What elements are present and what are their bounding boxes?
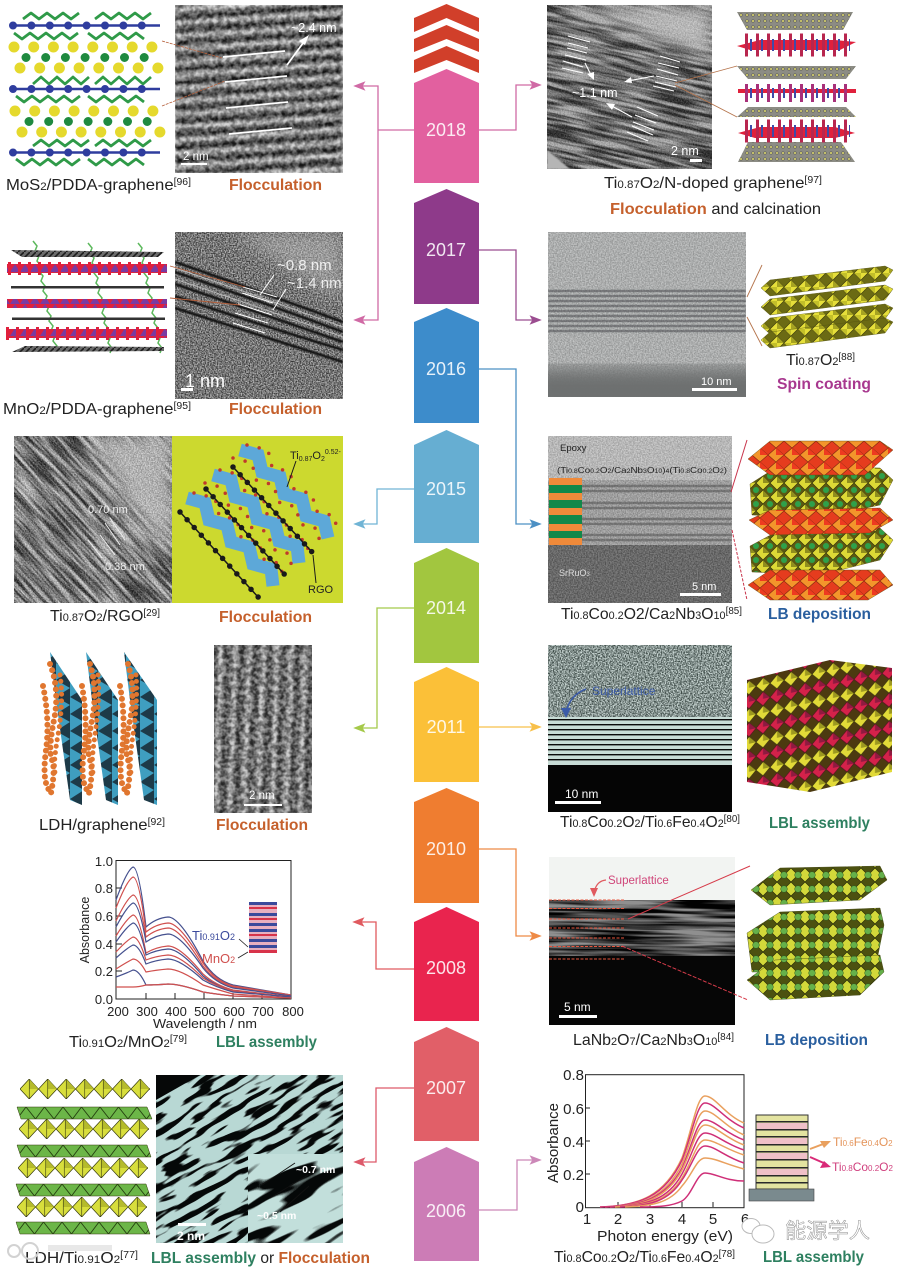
caption: LaNb2O7/Ca2Nb3O10: LaNb2O7/Ca2Nb3O10: [573, 1032, 717, 1049]
label arrow: Ti0.8Co0.2O2: Ti0.8Co0.2O2: [832, 1160, 894, 1174]
micrograph: Ti0.87O2/N-doped graphene TEM: [547, 5, 712, 169]
timeline arrow: 2010: [414, 788, 479, 903]
micrograph: LaNb2O7/Ca2Nb3O10 TEM: 5 nm: [564, 1000, 591, 1014]
diagram: Ti0.87O2/N-doped graphene structure: [737, 12, 856, 162]
leader lines: MoS2: [162, 41, 225, 106]
micrograph: Ti0.87O2/RGO TEM: 0.38 nm: [105, 561, 145, 573]
caption: Ti0.8Co0.2O2/Ca2Nb3O10: Ti0.8Co0.2O2/Ca2Nb3O10: [561, 606, 726, 623]
micrograph: Ti0.8Co0.2O2/Ti0.6Fe0.4O2 TEM: [548, 645, 732, 812]
diagram: Ti0.87O2/RGO structure: 0.87: [299, 456, 312, 463]
chart: Ti0.8Co0.2O2/Ti0.6Fe0.4O2 absorbance vs photon energy: 0.4: [563, 1134, 584, 1151]
micrograph: Ti0.87O2/N-doped graphene TEM: ~1.1 nm: [572, 86, 618, 100]
chart: Ti0.91O2/MnO2 absorbance vs wavelength: 0.4: [95, 937, 113, 952]
timeline arrow: 2011: 2011: [427, 717, 465, 737]
caption: MoS2/PDDA-graphene: MoS2/PDDA-graphene: [6, 177, 169, 194]
diagram: Ti0.87O2 layered structure: [761, 266, 893, 348]
timeline arrow: 2017: 2017: [426, 240, 466, 260]
label leaders: [238, 939, 248, 958]
diagram: Ti0.8Co0.2O2/Ca2Nb3O10 structure: [748, 441, 893, 600]
chart: Ti0.91O2/MnO2 absorbance vs wavelength: 0.8: [95, 881, 113, 896]
chart: Ti0.8Co0.2O2/Ti0.6Fe0.4O2 absorbance vs photon energy: Photon energy (eV): [597, 1228, 733, 1245]
arrow: 2018 to left panels: [355, 82, 414, 324]
method label: Flocculation: Flocculation: [219, 609, 312, 626]
micrograph: MoS2 TEM with 2.4 nm spacing: [175, 5, 343, 173]
arrow: 2011 to right panel: [479, 724, 540, 730]
micrograph: MnO2 TEM with lattice spacings: ~1.4 nm: [287, 275, 342, 292]
chart: Ti0.91O2/MnO2 absorbance vs wavelength: Wavelength / nm: [153, 1016, 257, 1031]
caption: Ti0.8Co0.2O2/Ti0.6Fe0.4O2: Ti0.8Co0.2O2/Ti0.6Fe0.4O2: [560, 814, 724, 831]
caption: MnO2/PDDA-graphene: [95]: [174, 401, 191, 412]
leader lines: Ti0.87O2: [747, 265, 762, 346]
chart: Ti0.8Co0.2O2/Ti0.6Fe0.4O2 absorbance vs photon energy: 5: [709, 1211, 717, 1228]
caption: LDH/graphene: LDH/graphene: [39, 817, 143, 834]
micrograph: Ti0.87O2/N-doped graphene TEM: 2 nm: [671, 144, 699, 158]
chart: Ti0.91O2/MnO2 absorbance vs wavelength: 800: [282, 1004, 304, 1019]
timeline arrow: 2008: [414, 907, 479, 1021]
micrograph: Ti0.8Co0.2O2/Ca2Nb3O10 TEM: [548, 436, 732, 603]
micrograph: Ti0.8Co0.2O2/Ti0.6Fe0.4O2 TEM: Superlattice: [592, 684, 656, 698]
method label: LB deposition: LB deposition: [765, 1032, 868, 1049]
arrow: 2007 to left panel: [355, 1088, 414, 1166]
caption: LDH/graphene: [92]: [148, 817, 165, 828]
caption: Ti0.91O2/MnO2: Ti0.91O2/MnO2: [69, 1034, 170, 1051]
chart: Ti0.8Co0.2O2/Ti0.6Fe0.4O2 absorbance vs photon energy: 4: [678, 1211, 686, 1228]
caption: MnO2/PDDA-graphene: MnO2/PDDA-graphene: [3, 401, 168, 418]
chart: Ti0.8Co0.2O2/Ti0.6Fe0.4O2 absorbance vs photon energy: 0.6: [563, 1101, 584, 1118]
chart: Ti0.8Co0.2O2/Ti0.6Fe0.4O2 absorbance vs photon energy: 3: [646, 1211, 654, 1228]
diagram: Ti0.87O2/RGO structure: RGO: [308, 584, 334, 596]
micrograph: Ti0.8Co0.2O2/Ca2Nb3O10 TEM: Epoxy: [560, 443, 587, 454]
timeline arrow: 2018: 2018: [426, 120, 466, 140]
timeline arrow: 2008: 2008: [426, 958, 466, 978]
chart: Ti0.8Co0.2O2/Ti0.6Fe0.4O2 absorbance vs photon energy: [545, 1067, 749, 1245]
micrograph: Ti0.8Co0.2O2/Ca2Nb3O10 TEM: SrRuO3: [559, 568, 591, 578]
leader lines: Ti0.87O2/N-doped graphene: [675, 66, 737, 117]
method label: LBL assembly: LBL assembly: [763, 1249, 864, 1266]
micrograph: LDH/Ti0.91O2 TEM: ~0.7 nm: [296, 1164, 335, 1176]
diagram: MnO2/PDDA-graphene structure: [6, 241, 167, 353]
method label: Flocculation: Flocculation: [216, 817, 308, 834]
chart: Ti0.8Co0.2O2/Ti0.6Fe0.4O2 absorbance vs photon energy: 2: [614, 1211, 622, 1228]
inset: orange and green layer stack: [549, 478, 582, 545]
micrograph: MnO2 TEM with lattice spacings: 1 nm: [185, 371, 225, 391]
chart: Ti0.91O2/MnO2 absorbance vs wavelength: Absorbance: [78, 897, 92, 963]
micrograph: LDH/Ti0.91O2 TEM: [156, 1075, 343, 1243]
chart: Ti0.91O2/MnO2 absorbance vs wavelength: 0.2: [95, 964, 113, 979]
timeline arrow: 2006: 2006: [426, 1201, 466, 1221]
micrograph: LDH/Ti0.91O2 TEM: 2 nm: [177, 1229, 205, 1243]
caption: Ti0.8Co0.2O2/Ti0.6Fe0.4O2: [80]: [724, 814, 740, 825]
timeline arrow: 2007: [414, 1027, 479, 1141]
chart: Ti0.91O2/MnO2 absorbance vs wavelength: 0.6: [95, 909, 113, 924]
caption: Ti0.8Co0.2O2/Ti0.6Fe0.4O2: [78]: [719, 1249, 735, 1260]
method label: LBL assembly: LBL assembly: [769, 815, 870, 832]
caption: Ti0.91O2/MnO2: [79]: [170, 1034, 187, 1045]
chart: Ti0.8Co0.2O2/Ti0.6Fe0.4O2 absorbance vs photon energy: 0: [576, 1199, 584, 1216]
micrograph: MoS2 TEM with 2.4 nm spacing: ~2.4 nm: [291, 21, 337, 35]
watermark: WeChat icon and name: [742, 1218, 870, 1243]
caption: Ti0.87O2/N-doped graphene: [97]: [804, 175, 822, 186]
method label: Spin coating: Spin coating: [777, 376, 871, 393]
chart: Ti0.91O2/MnO2 absorbance vs wavelength: 300: [136, 1004, 158, 1019]
caption: Ti0.87O2: Ti0.87O2: [786, 352, 838, 369]
arrow: 2010 to right panel: [479, 849, 540, 940]
diagram: LDH/Ti0.91O2 structure: [16, 1079, 152, 1234]
micrograph: MoS2 TEM with 2.4 nm spacing: 2 nm: [183, 151, 209, 163]
caption: Ti0.87O2/RGO: Ti0.87O2/RGO: [50, 608, 143, 625]
timeline arrow: 2014: [414, 548, 479, 663]
chart: Ti0.91O2/MnO2 absorbance vs wavelength: 500: [194, 1004, 216, 1019]
arrow: 2016 to right panel: [479, 369, 540, 528]
arrow: 2006 to right panel: [479, 1156, 540, 1210]
timeline arrow: 2015: 2015: [426, 479, 466, 499]
timeline arrow: 2011: [414, 667, 479, 782]
series label: MnO2: MnO2: [202, 951, 235, 966]
chart: Ti0.91O2/MnO2 absorbance vs wavelength: 0.0: [95, 992, 113, 1007]
timeline arrow: 2007: 2007: [426, 1078, 466, 1098]
chart: Ti0.8Co0.2O2/Ti0.6Fe0.4O2 absorbance vs photon energy: 1: [583, 1211, 591, 1228]
timeline arrow: 2016: [414, 308, 479, 423]
caption: Ti0.87O2: [88]: [838, 352, 855, 363]
arrow: 2014 to left panel: [355, 608, 414, 732]
leader lines: MnO2: [170, 266, 245, 305]
chart: Ti0.91O2/MnO2 absorbance vs wavelength: 600: [223, 1004, 245, 1019]
label arrow: Ti0.6Fe0.4O2: Ti0.6Fe0.4O2: [833, 1135, 893, 1149]
chart: Ti0.91O2/MnO2 absorbance vs wavelength: 200: [107, 1004, 129, 1019]
timeline arrow: 2017: [414, 189, 479, 304]
leader lines: LaNb2O7/Ca2Nb3O10: [622, 866, 750, 1000]
diagram: Ti0.87O2/RGO structure: 2: [321, 456, 325, 463]
inset: blue and red layer stack: [249, 902, 277, 953]
chart: Ti0.91O2/MnO2 absorbance vs wavelength: [78, 854, 304, 1031]
micrograph: MnO2 TEM with lattice spacings: ~0.8 nm: [277, 257, 332, 274]
micrograph: Ti0.8Co0.2O2/Ca2Nb3O10 TEM: 5 nm: [692, 581, 716, 593]
chart: Ti0.8Co0.2O2/Ti0.6Fe0.4O2 absorbance vs photon energy: 6: [741, 1211, 749, 1228]
chart: Ti0.8Co0.2O2/Ti0.6Fe0.4O2 absorbance vs photon energy: Absorbance: [545, 1103, 562, 1183]
caption: Ti0.87O2/N-doped graphene: Ti0.87O2/N-doped graphene: [604, 175, 797, 192]
caption: Ti0.87O2/RGO: [29]: [143, 608, 160, 619]
micrograph: Ti0.87O2/RGO TEM: 0.70 nm: [88, 504, 128, 516]
chart: Ti0.91O2/MnO2 absorbance vs wavelength: 1.0: [95, 854, 113, 869]
micrograph: Ti0.87O2/RGO TEM: [14, 436, 172, 603]
arrow: 2015 to left panel: [355, 489, 414, 528]
caption: LaNb2O7/Ca2Nb3O10: [84]: [717, 1032, 734, 1043]
leader lines: Ti0.8Co0.2O2/Ca2Nb3O10: [731, 440, 747, 600]
micrograph: Ti0.87O2 spin coating TEM: [548, 232, 746, 397]
diagram: Ti0.87O2/RGO structure: Ti: [290, 450, 299, 462]
micrograph: LDH/graphene TEM: [214, 645, 312, 813]
method label: Flocculation: Flocculation: [229, 177, 322, 194]
method label: LBL assembly or Flocculation: LBL assembly or Flocculation: [151, 1250, 370, 1267]
method label: Flocculation: Flocculation: [229, 401, 322, 418]
method label: Flocculation and calcination: Flocculation and calcination: [610, 201, 821, 218]
timeline arrow: 2010: 2010: [426, 839, 466, 859]
caption: Ti0.8Co0.2O2/Ca2Nb3O10: [85]: [726, 606, 742, 617]
chart: Ti0.91O2/MnO2 absorbance vs wavelength: 400: [165, 1004, 187, 1019]
timeline arrow: 2006: [414, 1147, 479, 1261]
timeline arrow: 2018: [414, 69, 479, 183]
micrograph: MnO2 TEM with lattice spacings: [175, 232, 343, 399]
method label: LBL assembly: LBL assembly: [216, 1034, 317, 1051]
diagram: Ti0.87O2/RGO structure: 0.52-: [325, 449, 341, 456]
timeline arrow: 2015: [414, 430, 479, 543]
faint corner watermark logo: [8, 1243, 112, 1259]
micrograph: LaNb2O7/Ca2Nb3O10 TEM: [549, 857, 735, 1025]
diagram: Ti0.8Co0.2O2/Ti0.6Fe0.4O2 structure: [747, 660, 892, 792]
timeline arrow: 2016: 2016: [426, 359, 466, 379]
arrow: 2017 to right panel: [479, 250, 540, 324]
micrograph: LDH/graphene TEM: 2 nm: [249, 790, 275, 802]
arrow: 2018 to right panel: [479, 82, 540, 130]
caption: LDH/Ti0.91O2: LDH/Ti 0.91O2: [25, 1250, 120, 1267]
arrow: 2008 to left panel: [354, 918, 414, 969]
diagram: layered film on substrate: [749, 1115, 814, 1201]
icon: red chevrons above timeline: [414, 4, 479, 73]
caption: LDH/Ti0.91O2: [77]: [120, 1250, 138, 1261]
chart: Ti0.8Co0.2O2/Ti0.6Fe0.4O2 absorbance vs photon energy: 0.2: [563, 1167, 584, 1184]
micrograph: Ti0.8Co0.2O2/Ti0.6Fe0.4O2 TEM: 10 nm: [565, 787, 598, 801]
series label: Ti0.91O2: Ti0.91O2: [192, 928, 235, 943]
micrograph: LaNb2O7/Ca2Nb3O10 TEM: Superlattice: [608, 875, 669, 887]
diagram: LaNb2O7/Ca2Nb3O10 structure: [747, 866, 887, 1000]
caption: Ti0.8Co0.2O2/Ti0.6Fe0.4O2: Ti0.8Co0.2O2/Ti0.6Fe0.4O2: [554, 1249, 719, 1266]
diagram: LDH/graphene structure: [43, 652, 157, 805]
diagram: MoS2/PDDA-graphene structure: [13, 13, 166, 165]
label arrow: Ti0.8Co0.2O2: [810, 1157, 894, 1174]
micrograph: Ti0.8Co0.2O2/Ca2Nb3O10 TEM: (Ti0.8Co 0.2O2/Ca 2Nb 3O10)4(Ti0.8Co 0.2O2): [557, 465, 727, 475]
micrograph: Ti0.87O2 spin coating TEM: 10 nm: [701, 376, 732, 388]
caption: MoS2/PDDA-graphene: [96]: [174, 177, 191, 188]
method label: LB deposition: LB deposition: [768, 606, 871, 623]
timeline arrow: 2014: 2014: [426, 598, 466, 618]
chart: Ti0.8Co0.2O2/Ti0.6Fe0.4O2 absorbance vs photon energy: 0.8: [563, 1067, 584, 1084]
diagram: Ti0.87O2/RGO structure: O: [312, 450, 321, 462]
chart: Ti0.91O2/MnO2 absorbance vs wavelength: 700: [252, 1004, 274, 1019]
diagram: Ti0.87O2/RGO structure: [172, 436, 343, 603]
micrograph: LDH/Ti0.91O2 TEM: ~0.5 nm: [257, 1210, 296, 1222]
watermark: WeChat icon and name: 能源学人: [785, 1220, 870, 1243]
